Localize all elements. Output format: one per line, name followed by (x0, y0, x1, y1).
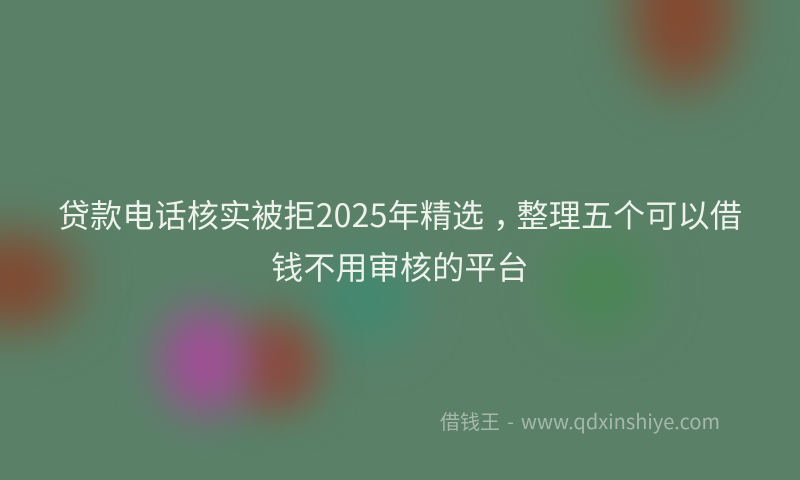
blob: teal centre (322, 258, 412, 342)
site credit: 借钱王 - www.qdxinshiye.com (440, 406, 720, 435)
blob: left red-brown (0, 232, 75, 328)
blob: top right red-brown (630, 0, 734, 90)
title: 钱不用审核的平台 (271, 243, 529, 289)
blob: magenta (160, 308, 248, 414)
title (58, 191, 742, 289)
blob: right green (550, 238, 650, 333)
blob: red-brown beside magenta (232, 316, 320, 412)
title: 贷款电话核实被拒2025年精选 ，整理五个可以借 (58, 191, 742, 237)
